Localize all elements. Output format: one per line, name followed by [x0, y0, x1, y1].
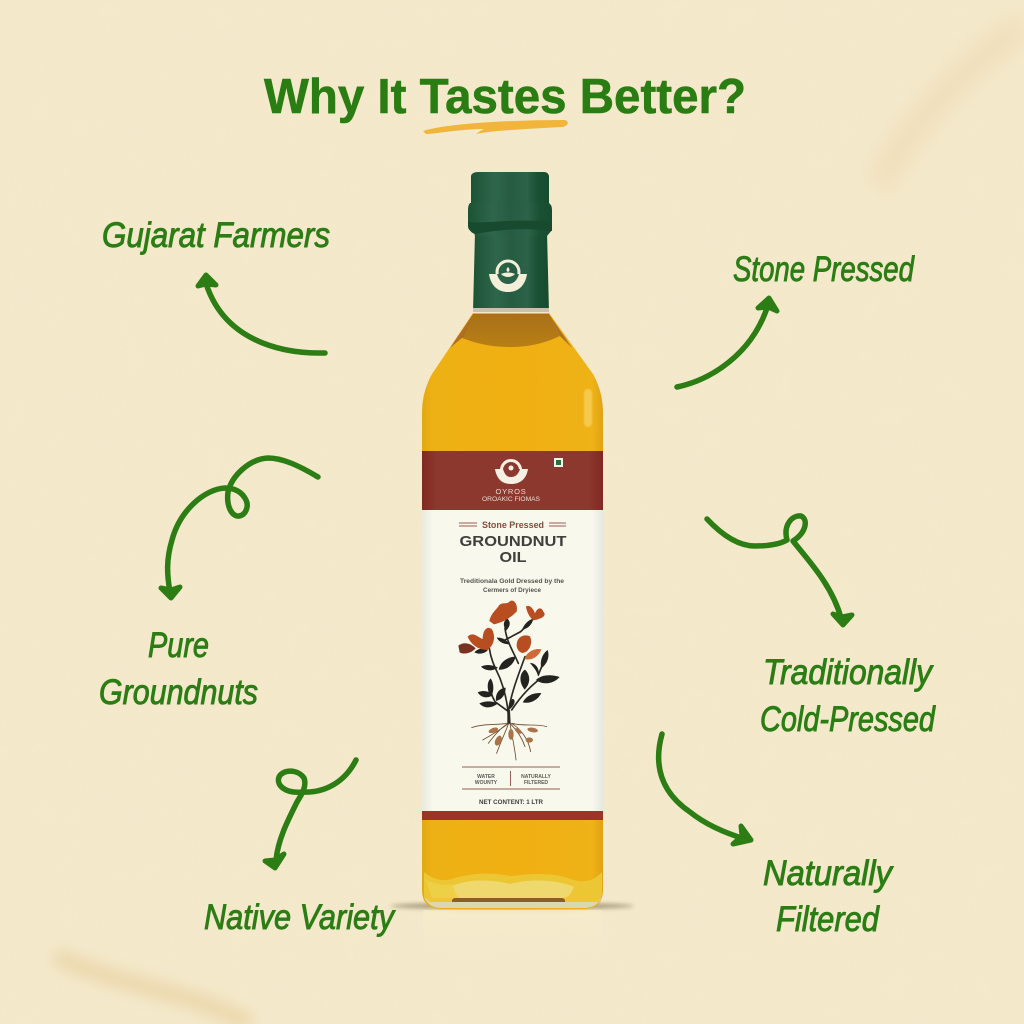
arrow: Gujarat Farmers [198, 275, 325, 353]
label: Traditionally Cold-Pressed [760, 653, 936, 739]
label heading: OIL [500, 549, 526, 566]
label: Naturally Filtered [763, 854, 894, 939]
arrow: Traditionally Cold-Pressed [707, 516, 852, 625]
brand name [482, 487, 540, 503]
label: Native Variety: Native Variety [204, 898, 396, 937]
feature box [462, 767, 560, 789]
label heading: GROUNDNUT [460, 533, 566, 550]
title underline [423, 120, 568, 134]
plant illustration [458, 601, 560, 760]
brand name: OROAKIC FIOMAS [482, 496, 540, 503]
label: Traditionally Cold-Pressed: Cold-Pressed [760, 700, 936, 739]
feature box: FILTERED [524, 780, 548, 786]
net content: NET CONTENT: 1 LTR [479, 799, 543, 806]
label heading [459, 520, 566, 566]
neck logo [489, 261, 527, 292]
bottle shadow and reflection [390, 902, 634, 965]
label: Gujarat Farmers: Gujarat Farmers [102, 216, 330, 255]
label heading: Stone Pressed [482, 520, 544, 530]
veg mark [554, 458, 563, 467]
bottom maroon band [422, 811, 603, 820]
arrow: Naturally Filtered [659, 734, 751, 844]
glass highlight [584, 389, 592, 427]
brand name: OYROS [495, 487, 527, 496]
bottle base glass [424, 872, 602, 908]
oil body [422, 313, 603, 909]
arrow: Pure Groundnuts [161, 458, 318, 598]
label: Stone Pressed: Stone Pressed [733, 250, 915, 289]
bottle [390, 172, 634, 965]
top maroon label band [422, 451, 603, 510]
brand logo [495, 460, 528, 484]
neck [473, 232, 549, 312]
air gap [462, 314, 560, 347]
feature box: WOUNTY [475, 780, 498, 786]
arrow: Native Variety [265, 760, 356, 868]
label: Naturally Filtered: Filtered [776, 900, 880, 939]
label: Traditionally Cold-Pressed: Traditionally [763, 653, 934, 692]
label: Pure Groundnuts: Groundnuts [99, 673, 258, 712]
label description: Treditionala Gold Dressed by the [460, 578, 565, 585]
white label [422, 510, 603, 811]
title: Why It Tastes Better? [264, 70, 746, 124]
label: Pure Groundnuts [99, 626, 258, 712]
label: Pure Groundnuts: Pure [148, 626, 209, 665]
label description: Cermers of Dryiece [483, 587, 542, 594]
feature box: WATER [477, 774, 495, 780]
feature box: NATURALLY [521, 774, 552, 780]
arrow: Stone Pressed [677, 298, 777, 387]
label description [460, 578, 565, 594]
cap [468, 172, 552, 236]
label: Naturally Filtered: Naturally [763, 854, 894, 893]
